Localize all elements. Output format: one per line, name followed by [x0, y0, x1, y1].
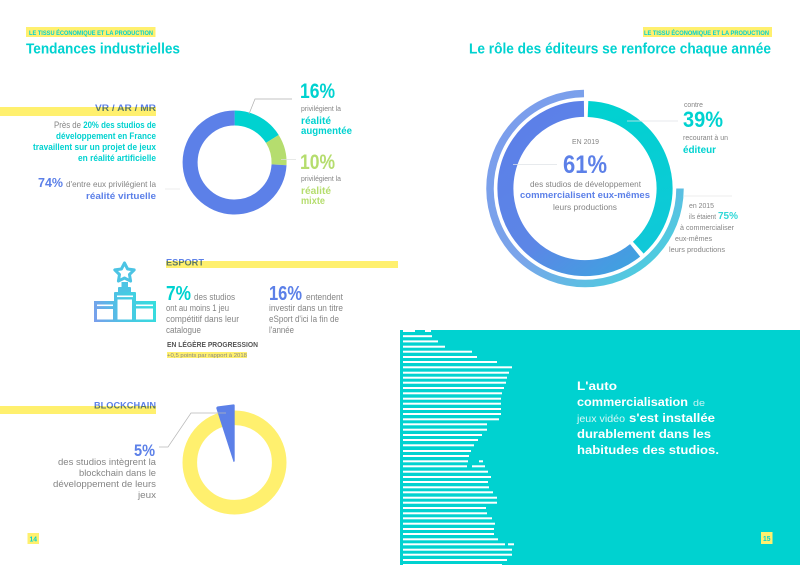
heading: ESPORT	[166, 258, 398, 268]
text block: auto commercialisation	[576, 379, 719, 457]
section tag: right page	[643, 27, 772, 37]
text block: 20% des studios: Près de 20% des studios de	[54, 120, 156, 130]
callout: 10% réalité mixte: réalité	[301, 186, 331, 197]
panel: teal block	[400, 330, 800, 565]
text block: 61% centre: 61%	[563, 151, 607, 179]
callout: 39% éditeur: recourant à un	[683, 135, 728, 142]
text block: auto commercialisation: durablement dans les	[577, 427, 711, 441]
text block: 20% des studios	[33, 120, 156, 163]
leader lines: VR AR MR donut	[165, 99, 296, 189]
note: en légère progression: EN LÉGÈRE PROGRESSION	[167, 340, 258, 349]
callout: 39% éditeur: éditeur	[683, 145, 716, 156]
heading: VR / AR / MR: VR / AR / MR	[95, 103, 157, 113]
text block: 61% centre: EN 2019	[572, 137, 599, 146]
stat: 7%: catalogue	[166, 325, 201, 335]
page number: 14: 14	[30, 534, 38, 544]
stat: 7%: compétitif dans leur	[166, 314, 239, 324]
callout: en 2015 75%: à commercialiser	[680, 225, 735, 232]
text block: blockchain description: des studios intègrent la	[58, 457, 157, 467]
text block: 74% réalité virtuelle: réalité virtuelle	[86, 191, 156, 202]
callout: en 2015 75%: leurs productions	[669, 247, 726, 254]
callout: 10% réalité mixte: mixte	[301, 196, 325, 207]
callout: 39% éditeur: 39%	[683, 107, 723, 132]
callout: 39% éditeur	[683, 102, 728, 156]
callout: en 2015 75%: ils étaient	[689, 214, 716, 221]
panel: VR AR MR text	[0, 103, 157, 202]
text block: 20% des studios: travaillent sur un projet de jeux	[33, 142, 156, 152]
stat: 7%: ont au moins 1 jeu	[166, 303, 229, 313]
callout: 16% réalité augmentée: privilégient la	[301, 104, 341, 113]
text block: auto commercialisation: jeux vidéo	[576, 413, 625, 425]
stat: 7%	[166, 283, 239, 335]
callout: en 2015 75%: eux-mêmes	[675, 236, 712, 243]
pattern: white stripes silhouette	[403, 330, 514, 565]
text block: blockchain description	[53, 457, 157, 500]
stat: 16%: 16%	[269, 283, 302, 305]
text block: 74% réalité virtuelle	[38, 175, 156, 202]
text block: 74% réalité virtuelle: 74%	[38, 175, 63, 190]
callout: 16% réalité augmentée	[300, 80, 352, 137]
page number: 14	[28, 533, 39, 544]
stat: 16%: l'année	[269, 325, 294, 335]
stat: 16%: investir dans un titre	[269, 303, 343, 313]
callout: 16% réalité augmentée: réalité	[301, 116, 331, 127]
page number: 15	[761, 532, 772, 544]
callout: 16% réalité augmentée: 16%	[300, 80, 335, 103]
panel: blockchain text	[0, 400, 157, 500]
panel: eSport	[166, 258, 398, 359]
stat: 16%: eSport d'ici la fin de	[269, 314, 339, 324]
callout: en 2015 75%: en 2015	[689, 203, 714, 210]
stat: 7%: des studios	[194, 292, 236, 302]
note: en légère progression: +0,5 points par rapport à 2018	[167, 353, 247, 359]
text block: auto commercialisation: s'est installée	[629, 411, 715, 425]
callout: 16% réalité augmentée: augmentée	[301, 126, 352, 137]
text block: blockchain description: développement de leurs	[53, 479, 156, 489]
section tag: right page: LE TISSU ÉCONOMIQUE ET LA PRODUCTION	[644, 29, 769, 37]
section tag: left page	[26, 27, 156, 37]
heading: BLOCKCHAIN	[0, 400, 156, 414]
text block: 20% des studios: en réalité artificielle	[78, 153, 156, 163]
callout: 39% éditeur: contre	[684, 102, 703, 109]
chart: editors double ring	[490, 94, 732, 283]
title: Tendances industrielles: Tendances industrielles	[26, 42, 180, 58]
icon: trophy podium	[94, 263, 156, 322]
text block: 61% centre: leurs productions	[553, 202, 617, 212]
text block: auto commercialisation: habitudes des studios.	[577, 443, 719, 457]
chart: blockchain donut	[159, 404, 279, 507]
note: en légère progression	[167, 340, 258, 359]
stat: 16%	[269, 283, 344, 335]
heading: ESPORT: ESPORT	[166, 258, 205, 268]
text block: 61% centre	[520, 137, 650, 212]
chart: VR AR MR donut	[190, 118, 279, 207]
title: Le rôle des éditeurs: Le rôle des éditeurs se renforce chaque année	[469, 42, 771, 58]
callout: 10% réalité mixte: 10%	[300, 151, 335, 174]
callout: en 2015 75%	[669, 203, 738, 254]
page number: 15: 15	[763, 534, 770, 543]
text block: auto commercialisation: de	[693, 398, 705, 409]
heading: BLOCKCHAIN: BLOCKCHAIN	[94, 400, 156, 410]
text block: auto commercialisation: L'auto	[577, 379, 617, 393]
stat: 16%: entendent	[306, 292, 344, 302]
text block: 20% des studios: développement en France	[56, 131, 156, 141]
text block: blockchain description: jeux	[137, 490, 156, 500]
stat: 5%: 5%	[134, 441, 155, 460]
callout: en 2015 75%: 75%	[718, 211, 738, 222]
callout: 10% réalité mixte	[300, 151, 341, 207]
text block: 61% centre: commercialisent eux-mêmes	[520, 190, 650, 201]
stat: 7%: 7%	[166, 283, 191, 305]
text block: 61% centre: des studios de développement	[530, 179, 642, 189]
section tag: left page: LE TISSU ÉCONOMIQUE ET LA PRODUCTION	[29, 29, 153, 37]
heading: VR / AR / MR	[0, 103, 157, 116]
callout: 10% réalité mixte: privilégient la	[301, 174, 341, 183]
text block: auto commercialisation: commercialisation	[577, 395, 688, 409]
text block: blockchain description: blockchain dans le	[79, 468, 156, 478]
text block: 74% réalité virtuelle: d'entre eux privilégient la	[66, 179, 156, 189]
